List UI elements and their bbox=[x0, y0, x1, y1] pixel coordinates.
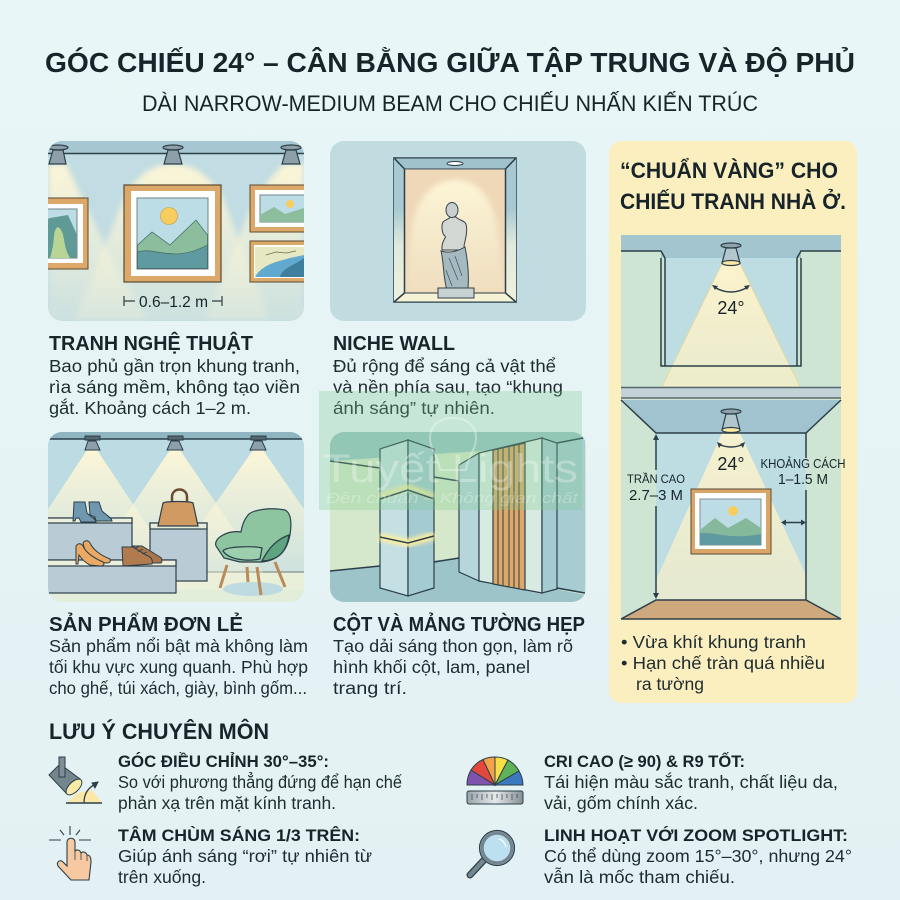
diagram: plan view with beam bbox=[621, 235, 841, 398]
armchair bbox=[216, 509, 291, 596]
handbag bbox=[158, 490, 198, 526]
text: adjusting angle bbox=[118, 752, 402, 813]
left framed painting bbox=[48, 198, 88, 270]
framed painting bbox=[691, 489, 771, 554]
watermark: Đèn chuẩn – Không gian chất bbox=[326, 490, 579, 507]
text: adjusting angle: phản xạ trên mặt kính tranh. bbox=[118, 793, 336, 813]
side panel with slats bbox=[459, 438, 557, 593]
text: niche wall: ánh sáng” tự nhiên. bbox=[333, 398, 495, 418]
text: cot va mang tuong hep bbox=[333, 612, 585, 698]
center framed painting bbox=[124, 185, 221, 282]
text: cot va mang tuong hep: CỘT VÀ MẢNG TƯỜNG HẸP bbox=[333, 612, 585, 636]
distance label: KHOẢNG CÁCH bbox=[760, 456, 846, 471]
text: beam center bbox=[118, 826, 372, 887]
distance label bbox=[760, 456, 846, 488]
icon: magnifier bbox=[470, 830, 514, 875]
icon: pointing hand bbox=[49, 826, 91, 880]
text: cri: vải, gốm chính xác. bbox=[544, 793, 698, 813]
track lamps bbox=[48, 145, 301, 164]
text: tranh nghe thuat: rìa sáng mềm, không tạo viền bbox=[49, 377, 300, 397]
panel: art gallery illustration bbox=[48, 141, 304, 321]
text: tranh nghe thuat: Bao phủ gần trọn khung tranh, bbox=[49, 356, 300, 376]
angle arc and label bbox=[717, 442, 745, 474]
dimension label bbox=[123, 296, 223, 307]
panel: retail products illustration bbox=[48, 432, 304, 602]
dimension label: 0.6–1.2 m bbox=[139, 294, 208, 311]
ceiling height label: 2.7–3 M bbox=[629, 488, 683, 504]
icon: angled spotlight bbox=[49, 757, 102, 803]
section heading: professional notes: LƯU Ý CHUYÊN MÔN bbox=[49, 719, 269, 744]
text: niche wall: NICHE WALL bbox=[333, 333, 455, 355]
boots bbox=[73, 502, 112, 522]
text: beam center: TÂM CHÙM SÁNG 1/3 TRÊN: bbox=[118, 826, 360, 845]
heels bbox=[76, 541, 110, 566]
sidebar bullets: • Vừa khít khung tranh bbox=[621, 632, 806, 652]
text: niche wall: và nền phía sau, tạo “khung bbox=[333, 377, 563, 397]
watermark: Tuyết Lights bbox=[322, 447, 578, 491]
text: tranh nghe thuat: gắt. Khoảng cách 1–2 m. bbox=[49, 398, 251, 418]
text: cri: Tái hiện màu sắc tranh, chất liệu da, bbox=[544, 772, 838, 792]
brown shoes bbox=[122, 546, 162, 566]
angle arc and label bbox=[712, 285, 750, 318]
panel: columns illustration bbox=[330, 432, 586, 602]
text: cot va mang tuong hep: Tạo dải sáng thon gọn, làm rõ bbox=[333, 636, 573, 656]
text: beam center: Giúp ánh sáng “rơi” tự nhiên từ bbox=[118, 846, 372, 866]
sidebar bullets: ra tường bbox=[636, 674, 704, 694]
panel: niche wall illustration bbox=[330, 141, 586, 321]
watermark bbox=[319, 391, 582, 510]
panel: golden standard sidebar bbox=[609, 141, 857, 703]
distance label: 1–1.5 M bbox=[778, 472, 828, 488]
text: tranh nghe thuat bbox=[49, 331, 300, 418]
beams bbox=[48, 450, 304, 590]
pillar with light bands bbox=[380, 440, 434, 596]
text: cri: CRI CAO (≥ 90) & R9 TỐT: bbox=[544, 751, 745, 771]
text: zoom spotlight bbox=[544, 826, 852, 887]
text: adjusting angle: So với phương thẳng đứng để hạn chế bbox=[118, 772, 402, 792]
text: cot va mang tuong hep: trang trí. bbox=[333, 678, 407, 698]
sidebar bullets bbox=[621, 632, 825, 694]
display steps bbox=[40, 518, 207, 593]
angle arc and label: 24° bbox=[717, 298, 745, 318]
text: zoom spotlight: LINH HOẠT VỚI ZOOM SPOTLIGHT: bbox=[544, 826, 848, 845]
diagram: room elevation bbox=[621, 399, 846, 619]
text: adjusting angle: GÓC ĐIỀU CHỈNH 30°–35°: bbox=[118, 752, 329, 771]
text: san pham don le: Sản phẩm nổi bật mà không làm bbox=[49, 636, 308, 656]
sidebar heading: “CHUẨN VÀNG” CHO bbox=[620, 158, 838, 183]
text: beam center: trên xuống. bbox=[118, 867, 206, 887]
light beams bbox=[48, 164, 304, 321]
statue bbox=[438, 202, 474, 298]
angle arc and label: 24° bbox=[717, 454, 745, 474]
distance arrow bbox=[781, 520, 806, 526]
title: GÓC CHIẾU 24° – CÂN BẰNG GIỮA TẬP TRUNG VÀ ĐỘ PHỦ bbox=[45, 46, 855, 78]
text: san pham don le: tối khu vực xung quanh. Phù hợp bbox=[49, 657, 308, 677]
sidebar bullets: • Hạn chế tràn quá nhiều bbox=[621, 653, 825, 673]
lamps bbox=[85, 436, 266, 450]
right bottom framed painting bbox=[250, 240, 304, 282]
text: cri bbox=[544, 751, 838, 813]
icon: colour rendering gauge bbox=[467, 757, 523, 804]
text: san pham don le bbox=[49, 613, 308, 698]
text: tranh nghe thuat: TRANH NGHỆ THUẬT bbox=[49, 331, 253, 355]
text: san pham don le: SẢN PHẨM ĐƠN LẺ bbox=[49, 613, 243, 636]
text: zoom spotlight: Có thể dùng zoom 15°–30°, nhưng 24° bbox=[544, 846, 852, 866]
ceiling height label bbox=[627, 471, 685, 504]
text: cot va mang tuong hep: hình khối cột, lam, panel bbox=[333, 657, 530, 677]
text: niche wall bbox=[333, 333, 563, 418]
right top framed painting bbox=[250, 184, 304, 232]
sidebar heading bbox=[620, 158, 846, 214]
text: san pham don le: cho ghế, túi xách, giày, bình gốm... bbox=[49, 678, 307, 698]
ceiling height label: TRẦN CAO bbox=[627, 471, 685, 486]
niche light glow bbox=[409, 178, 500, 287]
downlight bbox=[447, 162, 463, 166]
sidebar heading: CHIẾU TRANH NHÀ Ở. bbox=[620, 189, 846, 214]
text: niche wall: Đủ rộng để sáng cả vật thể bbox=[333, 356, 556, 376]
ceiling lamp bbox=[721, 243, 741, 266]
text: zoom spotlight: vẫn là mốc tham chiếu. bbox=[544, 867, 735, 887]
subtitle: DÀI NARROW-MEDIUM BEAM CHO CHIẾU NHẤN KIẾN TRÚC bbox=[142, 91, 758, 116]
ceiling lamp bbox=[721, 409, 741, 432]
